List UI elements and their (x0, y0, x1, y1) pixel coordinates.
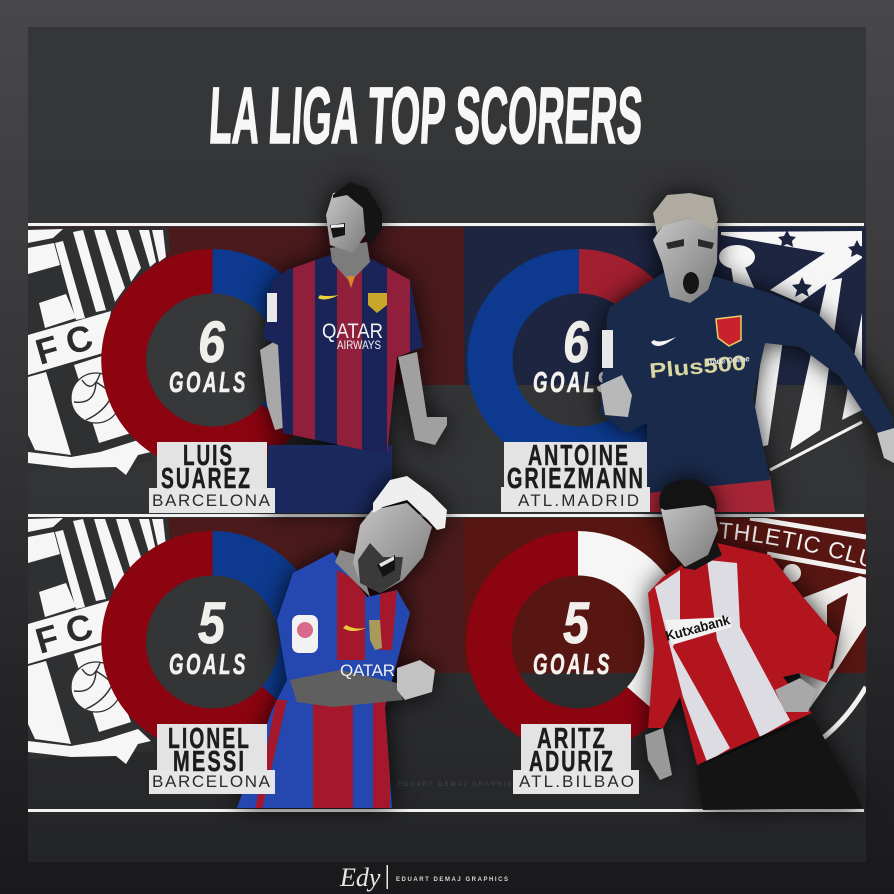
player: Messi (230, 476, 447, 815)
name label: Messi: LIONEL (168, 723, 251, 755)
row 1 colour bands (28, 227, 866, 385)
name label: Aduriz (513, 723, 639, 794)
name label: Suarez: BARCELONA (152, 491, 271, 510)
player: Griezmann: Plus500 (648, 352, 747, 383)
row 2 colour bands (28, 518, 866, 673)
donut chart: Griezmann (467, 249, 689, 471)
crest: FC Barcelona bottom: F (31, 616, 63, 662)
divider lines (28, 223, 864, 812)
player: Aduriz: Kutxabank (664, 611, 732, 644)
crest: Athletic Club (720, 518, 866, 740)
crest: FC Barcelona bottom: C (61, 605, 97, 652)
player: Aduriz (640, 479, 863, 810)
goals label: Griezmann: GOALS (533, 367, 612, 399)
crest: FC Barcelona bottom (28, 517, 170, 764)
donut chart: Messi (101, 531, 323, 753)
player: Suarez (260, 182, 447, 513)
goals label: Suarez: GOALS (169, 367, 248, 399)
crest: FC Barcelona top: F (31, 327, 63, 373)
number: 6 goals: 6 (198, 310, 226, 375)
name label: Aduriz: ARITZ (537, 723, 607, 755)
footer logo: EDUART DEMAJ GRAPHICS (396, 877, 508, 883)
donut chart: Aduriz (466, 531, 688, 753)
crest: FC Barcelona top: C (61, 316, 97, 363)
name label: Griezmann: ANTOINE (528, 440, 630, 472)
name label: Messi: MESSI (173, 746, 246, 778)
player: Suarez: AIRWAYS (337, 338, 381, 352)
name label: Aduriz: ATL.BILBAO (519, 772, 634, 791)
number: 5 goals: 5 (198, 591, 226, 656)
number: 5 goals: 5 (563, 591, 590, 656)
player: Griezmann (600, 193, 894, 512)
number: 6 goals: 6 (563, 310, 590, 375)
footer logo (339, 863, 508, 892)
name label: Messi: BARCELONA (152, 772, 271, 791)
name label: Aduriz: ADURIZ (529, 746, 615, 778)
crest: Atletico Madrid (719, 230, 866, 470)
goals label: Aduriz: GOALS (533, 649, 612, 681)
player: Messi: QATAR (340, 661, 395, 680)
crest: FC Barcelona top (28, 228, 170, 475)
name label: Messi (149, 723, 275, 794)
name label: Griezmann: GRIEZMANN (507, 463, 645, 495)
name label: Griezmann (501, 440, 650, 512)
name label: Griezmann: ATL.MADRID (518, 491, 639, 510)
donut chart: Suarez (101, 249, 323, 471)
goals label: Messi: GOALS (169, 649, 248, 681)
watermark: EDUART DEMAJ GRAPHICS (398, 782, 519, 788)
player: Griezmann: Trade Online (705, 354, 751, 367)
name label: Suarez (149, 440, 275, 513)
player: Suarez: QATAR (322, 320, 383, 343)
name label: Suarez: SUAREZ (161, 463, 252, 495)
name label: Suarez: LUIS (183, 440, 234, 472)
footer logo: Edy (339, 863, 381, 892)
